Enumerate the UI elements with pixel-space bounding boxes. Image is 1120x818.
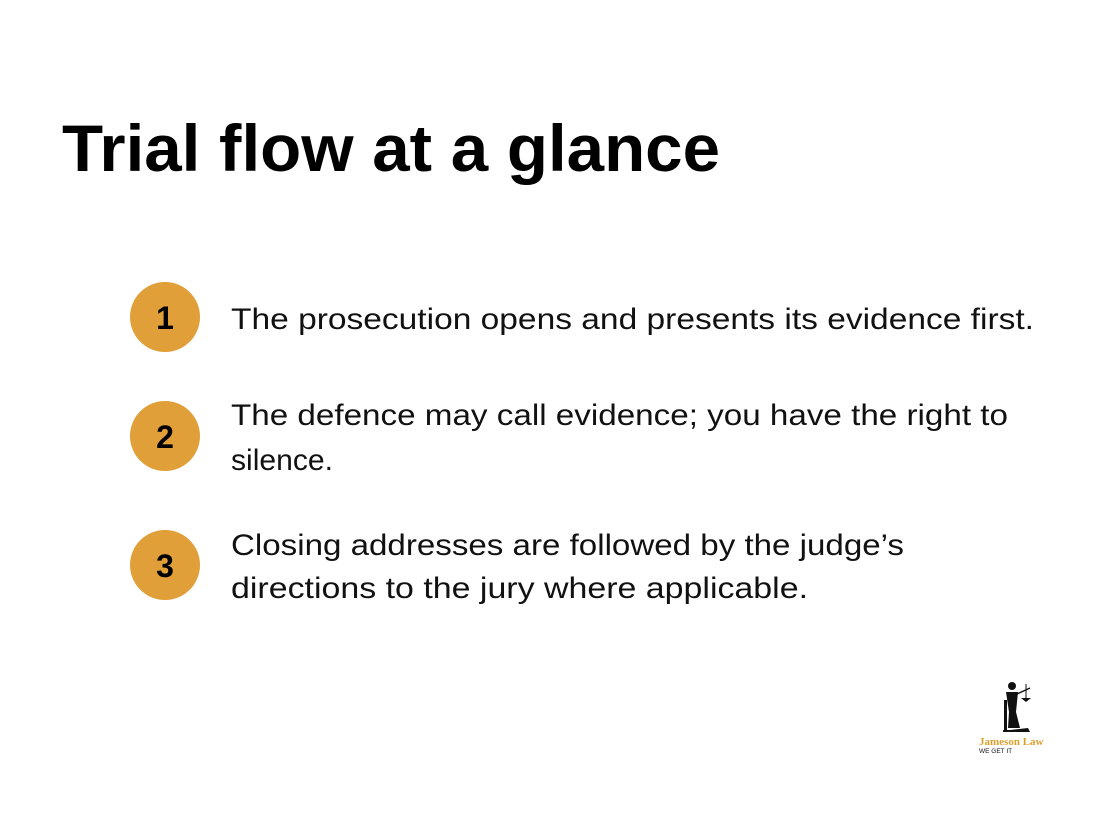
- logo: Jameson Law: WE GET IT: [979, 748, 1012, 755]
- icon: number circle 3: [130, 530, 200, 600]
- logo text: Jameson Law: [979, 736, 1044, 748]
- icon: number circle 1: [130, 282, 200, 352]
- step 2: [130, 399, 1008, 477]
- text: step 2: [231, 399, 1008, 477]
- icon: number circle 2: 2: [156, 419, 174, 455]
- icon: number circle 1: 1: [156, 300, 174, 336]
- logo: Jameson Law: [979, 682, 1044, 755]
- title: Trial flow at a glance: [62, 111, 720, 185]
- step 1: [130, 282, 1034, 352]
- text: step 2: silence.: [231, 444, 333, 477]
- text: step 3: directions to the jury where applicable.: [231, 572, 808, 605]
- text: step 3: [231, 529, 904, 605]
- text: step 1: The prosecution opens and presents its evidence first.: [231, 303, 1034, 336]
- icon: justice figure: [1003, 682, 1031, 732]
- icon: number circle 3: 3: [156, 548, 174, 584]
- step 3: [130, 529, 904, 605]
- text: step 3: Closing addresses are followed by the judge’s: [231, 529, 904, 562]
- icon: number circle 2: [130, 401, 200, 471]
- text: step 2: The defence may call evidence; you have the right to: [231, 399, 1008, 432]
